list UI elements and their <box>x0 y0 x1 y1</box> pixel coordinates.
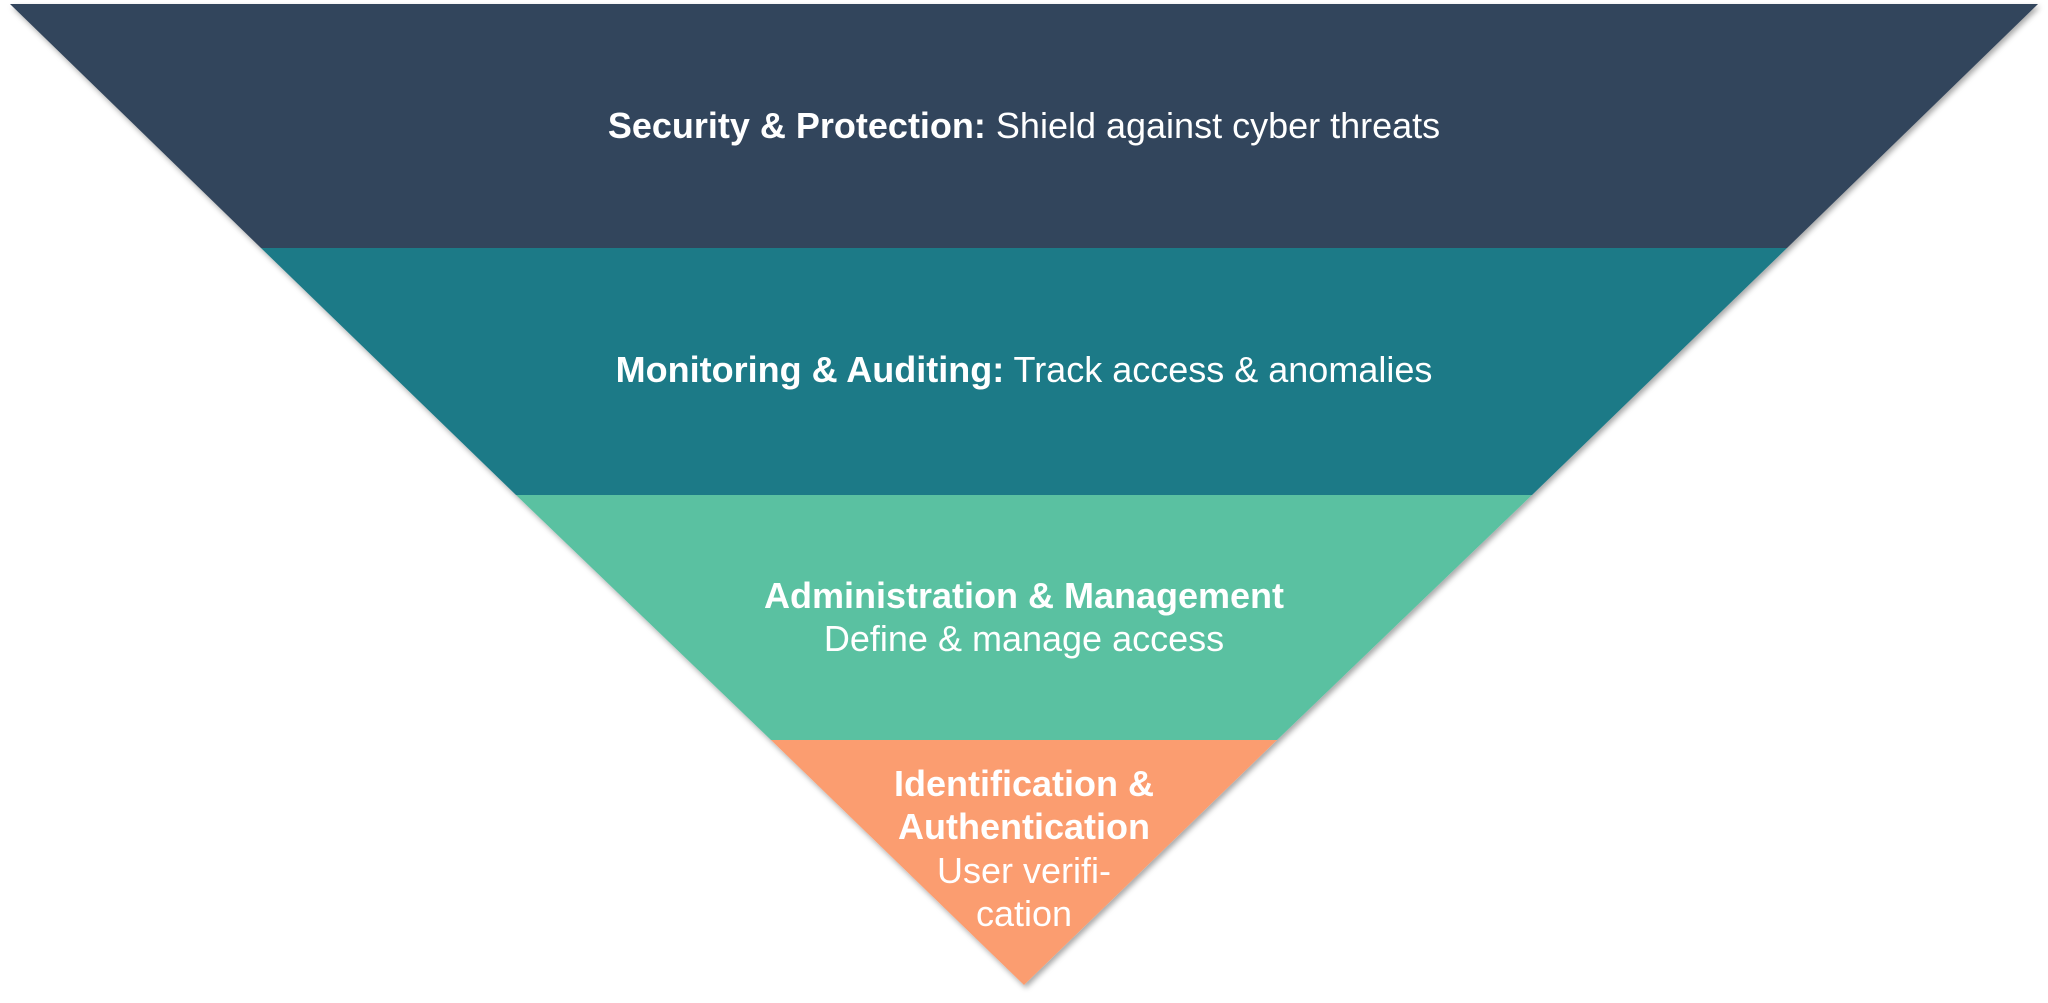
text: security & protection: Security & Protection: Shield against cyber threats <box>608 105 1440 146</box>
text: identification & authentication: Authentication <box>898 806 1150 847</box>
layer: monitoring & auditing <box>261 248 1787 495</box>
text: administration & management: Define & manage access <box>824 618 1224 659</box>
text: identification & authentication: cation <box>976 893 1072 934</box>
text: monitoring & auditing: Monitoring & Auditing: Track access & anomalies <box>616 349 1432 390</box>
text: identification & authentication: Identification & <box>894 763 1154 804</box>
layer: identification & authentication <box>771 740 1277 985</box>
text: identification & authentication: User verifi- <box>937 850 1111 891</box>
layer: security & protection <box>10 4 2038 248</box>
layer: administration & management <box>516 495 1532 740</box>
text: administration & management: Administration & Management <box>764 575 1284 616</box>
